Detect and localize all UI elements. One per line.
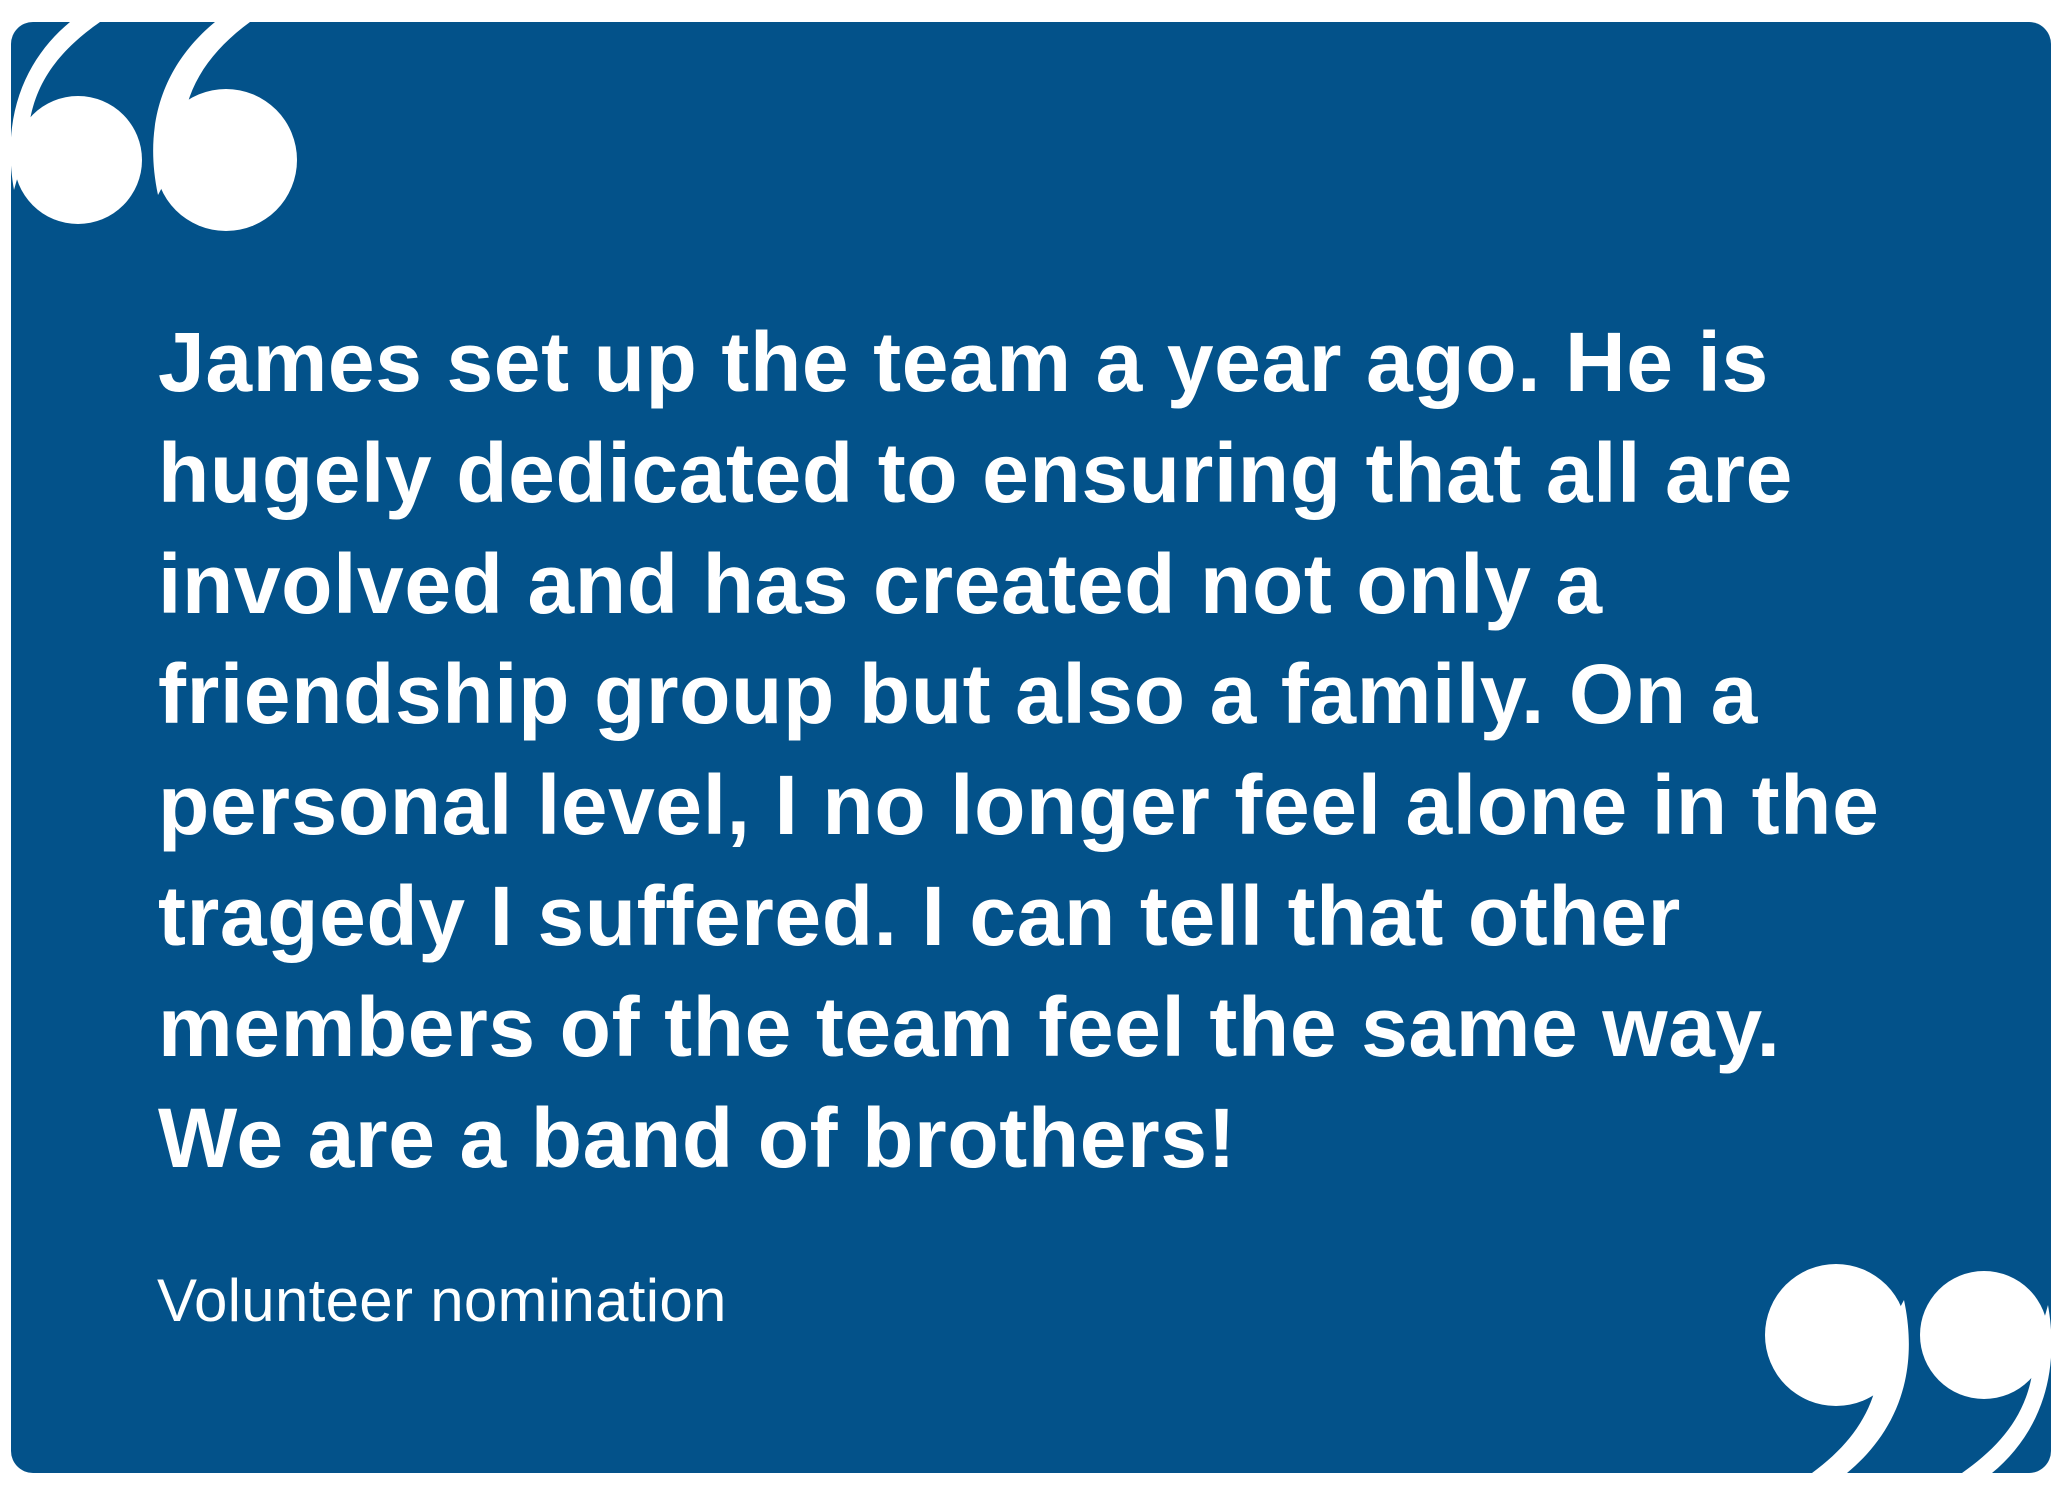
text block: attribution: Volunteer nomination xyxy=(157,1267,727,1334)
text block: quote: involved and has created not only a xyxy=(158,537,1603,631)
text block: quote: friendship group but also a family. On a xyxy=(158,647,1758,741)
text block: quote: James set up the team a year ago. He is xyxy=(158,315,1769,409)
icon: opening quote xyxy=(11,22,297,231)
text block: quote xyxy=(158,315,1879,1185)
text block: quote: tragedy I suffered. I can tell that other xyxy=(158,869,1681,963)
icon: closing quote xyxy=(1765,1264,2051,1473)
text block: quote: We are a band of brothers! xyxy=(158,1091,1236,1185)
text block: quote: personal level, I no longer feel alone in the xyxy=(158,758,1879,852)
text block: quote: members of the team feel the same way. xyxy=(158,980,1781,1074)
text block: quote: hugely dedicated to ensuring that all are xyxy=(158,426,1793,520)
